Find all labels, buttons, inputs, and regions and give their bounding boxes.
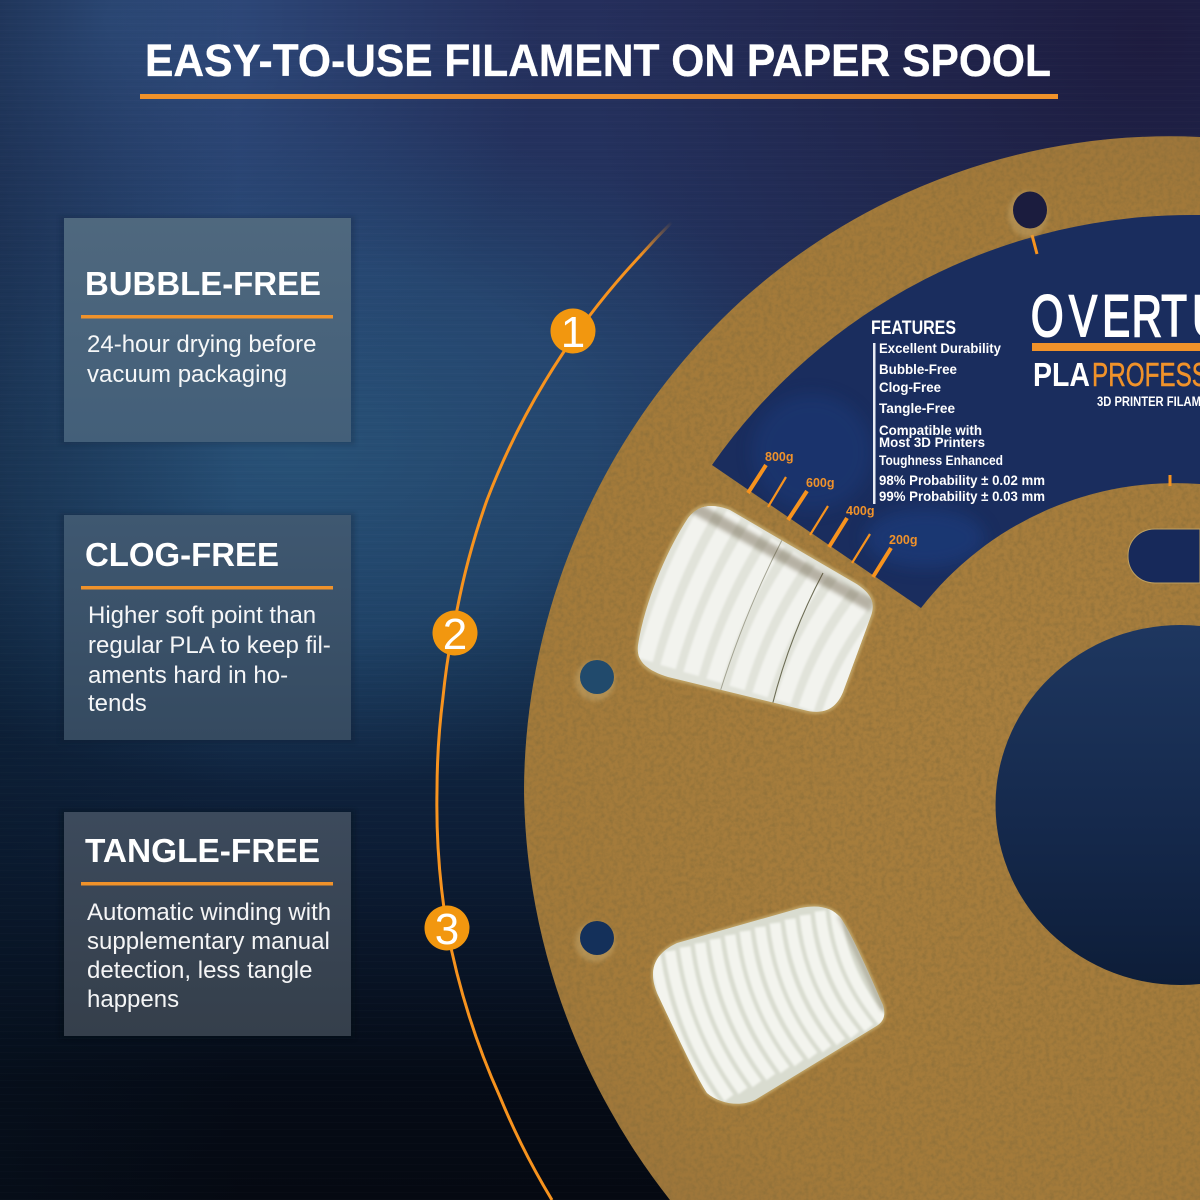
- features list: Clog-Free: [879, 379, 941, 395]
- features list: Excellent Durability: [879, 340, 1001, 356]
- marker 3: [424, 905, 470, 954]
- body: bubble-free: [87, 331, 316, 388]
- weight labels: [765, 450, 918, 547]
- window: filament top: [634, 502, 876, 715]
- features list: Most 3D Printers: [879, 434, 985, 450]
- paper spool: [520, 130, 1200, 1200]
- weight scale: [748, 235, 1170, 577]
- heading: clog-free: CLOG-FREE: [85, 536, 279, 573]
- features list: FEATURES: [871, 318, 956, 339]
- spool slot: [1128, 529, 1200, 583]
- body: clog-free: tends: [88, 690, 147, 717]
- features list: Compatible with: [879, 422, 982, 438]
- features list: Bubble-Free: [879, 361, 957, 377]
- spool label: [712, 215, 1200, 608]
- marker 1: [550, 308, 596, 357]
- brand logo: PLA: [1033, 356, 1090, 393]
- marker 3: 3: [435, 905, 459, 954]
- title underline: [140, 94, 1058, 99]
- panel: tangle-free: [60, 810, 355, 1039]
- orange timeline arc: [437, 222, 672, 1200]
- features list: Tangle-Free: [879, 400, 955, 416]
- spool hub opening: [996, 625, 1200, 985]
- features list: Toughness Enhanced: [879, 452, 1003, 468]
- marker 2: [432, 610, 478, 659]
- weight labels: 600g: [806, 476, 834, 490]
- weight labels: 800g: [765, 450, 794, 464]
- features list: [871, 318, 1045, 504]
- features list: 98% Probability ± 0.02 mm: [879, 472, 1045, 488]
- brand logo: [1031, 283, 1200, 409]
- title: EASY-TO-USE FILAMENT ON PAPER SPOOL: [145, 35, 1051, 86]
- features list: 99% Probability ± 0.03 mm: [879, 488, 1045, 504]
- body: clog-free: aments hard in ho-: [88, 662, 288, 689]
- spool hole: top: [1008, 191, 1048, 237]
- marker 1: 1: [561, 308, 585, 357]
- marker 2: 2: [443, 610, 467, 659]
- heading: bubble-free: BUBBLE-FREE: [85, 265, 321, 302]
- body: clog-free: regular PLA to keep fil-: [88, 632, 331, 659]
- body: tangle-free: [87, 899, 331, 1013]
- heading: tangle-free: TANGLE-FREE: [85, 832, 320, 869]
- body: bubble-free: 24-hour drying before: [87, 331, 316, 358]
- body: clog-free: [88, 602, 331, 717]
- weight labels: 200g: [889, 533, 918, 547]
- body: bubble-free: vacuum packaging: [87, 361, 287, 388]
- weight labels: 400g: [846, 504, 874, 518]
- panel: bubble-free: [60, 216, 355, 445]
- window: filament bottom: [645, 900, 890, 1110]
- spool hole: lower: [575, 921, 615, 962]
- body: tangle-free: supplementary manual: [87, 928, 330, 955]
- body: clog-free: Higher soft point than: [88, 602, 316, 629]
- spool hole: left: [575, 660, 615, 701]
- panel: clog-free: [60, 513, 355, 743]
- body: tangle-free: detection, less tangle: [87, 957, 312, 984]
- body: tangle-free: happens: [87, 986, 179, 1013]
- cardboard flange: [520, 130, 1200, 1200]
- body: tangle-free: Automatic winding with: [87, 899, 331, 926]
